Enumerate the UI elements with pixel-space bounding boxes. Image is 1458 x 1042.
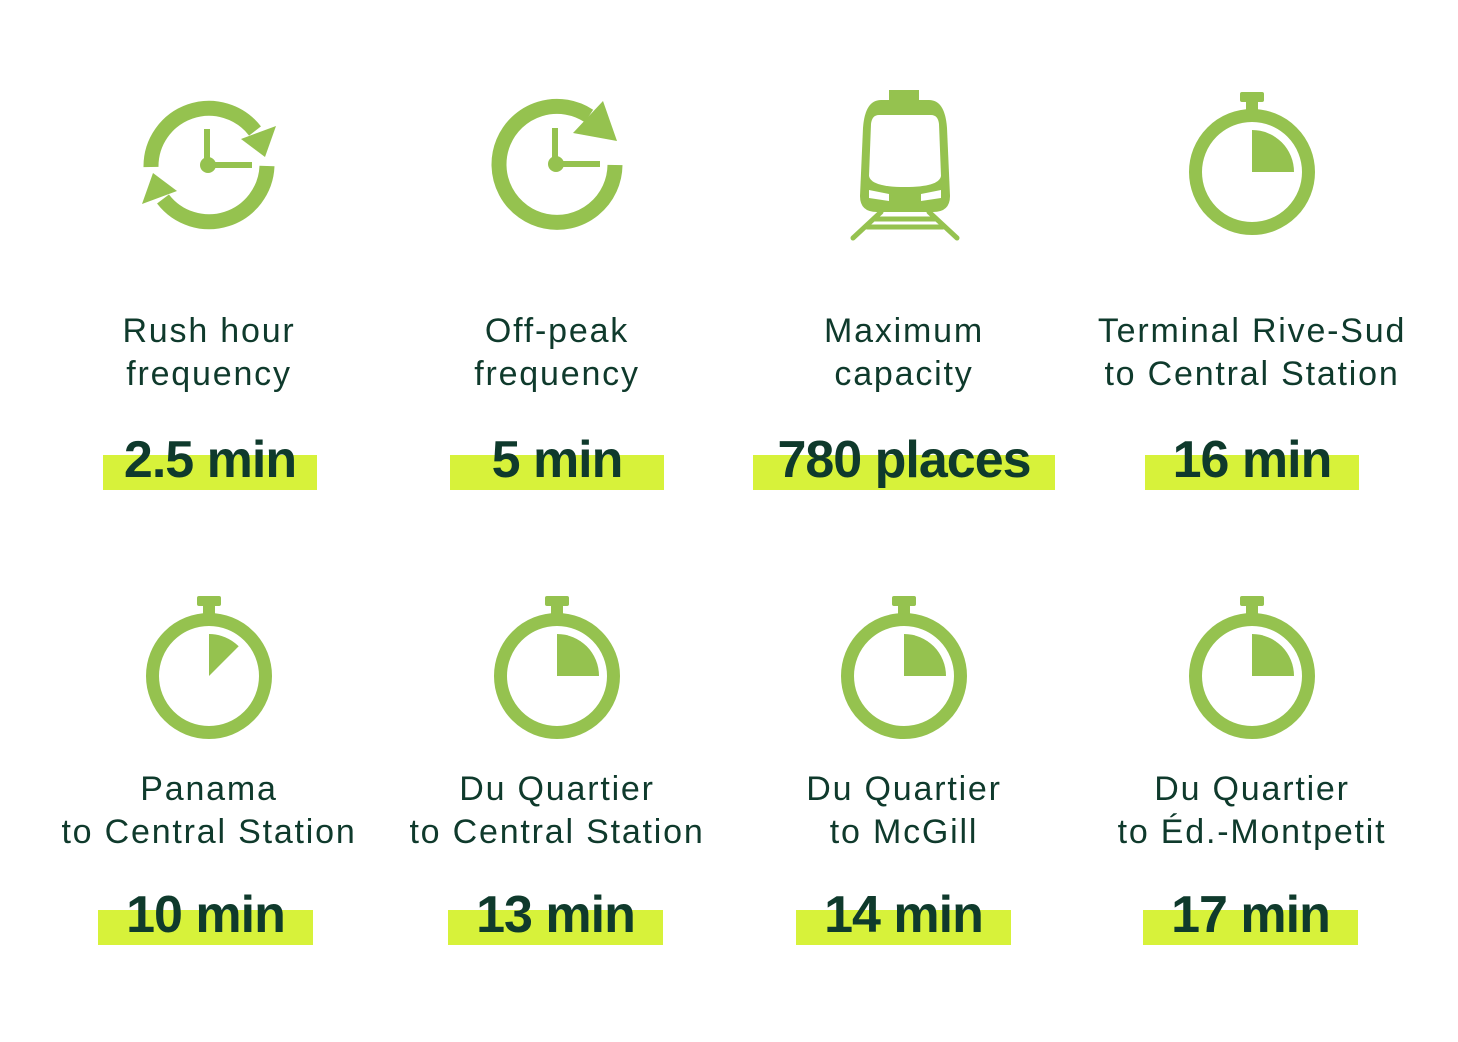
label: terminal rive-sud bbox=[1098, 312, 1406, 393]
label: du quartier mcgill: Du Quartier bbox=[806, 770, 1002, 808]
icon: stopwatch 17 bbox=[1189, 596, 1315, 739]
icon: stopwatch 13 bbox=[494, 596, 620, 739]
label: panama: to Central Station bbox=[61, 813, 357, 851]
label: terminal rive-sud: to Central Station bbox=[1104, 355, 1400, 393]
icon: train bbox=[850, 90, 960, 240]
value: 17 min: 17 min bbox=[1171, 886, 1330, 944]
value: 5 min bbox=[450, 431, 664, 490]
icon: stopwatch 16 bbox=[1189, 92, 1315, 235]
label: off-peak bbox=[474, 312, 640, 393]
label: du quartier mcgill bbox=[806, 770, 1002, 851]
label: du quartier mcgill: to McGill bbox=[830, 813, 978, 851]
value: 13 min: 13 min bbox=[476, 886, 635, 944]
label: rush hour: frequency bbox=[126, 355, 292, 393]
label: off-peak: frequency bbox=[474, 355, 640, 393]
value: 780 places: 780 places bbox=[777, 431, 1031, 489]
icon: stopwatch 14 bbox=[841, 596, 967, 739]
value: 14 min: 14 min bbox=[824, 886, 983, 944]
label: du quartier central: to Central Station bbox=[409, 813, 705, 851]
value: 5 min: 5 min bbox=[492, 431, 622, 489]
label: rush hour bbox=[122, 312, 296, 393]
label: du quartier central bbox=[409, 770, 705, 851]
label: capacity: capacity bbox=[834, 355, 974, 393]
value: 16 min: 16 min bbox=[1173, 431, 1331, 489]
label: off-peak: Off-peak bbox=[485, 312, 629, 350]
icon: stopwatch 10 bbox=[146, 596, 272, 739]
label: capacity: Maximum bbox=[824, 312, 984, 350]
label: terminal rive-sud: Terminal Rive-Sud bbox=[1098, 312, 1406, 350]
label: du quartier ed-montpetit bbox=[1118, 770, 1386, 851]
value: 10 min: 10 min bbox=[126, 886, 285, 944]
label: rush hour: Rush hour bbox=[122, 312, 296, 350]
icon: off-peak clock bbox=[492, 98, 622, 230]
label: capacity bbox=[824, 312, 984, 393]
label: panama: Panama bbox=[140, 770, 278, 808]
value: 2.5 min: 2.5 min bbox=[124, 431, 296, 489]
label: du quartier ed-montpetit: Du Quartier bbox=[1154, 770, 1350, 808]
label: du quartier ed-montpetit: to Éd.-Montpetit bbox=[1118, 813, 1386, 851]
icon: rush hour clock bbox=[142, 100, 276, 230]
label: du quartier central: Du Quartier bbox=[459, 770, 655, 808]
label: panama bbox=[61, 770, 357, 851]
